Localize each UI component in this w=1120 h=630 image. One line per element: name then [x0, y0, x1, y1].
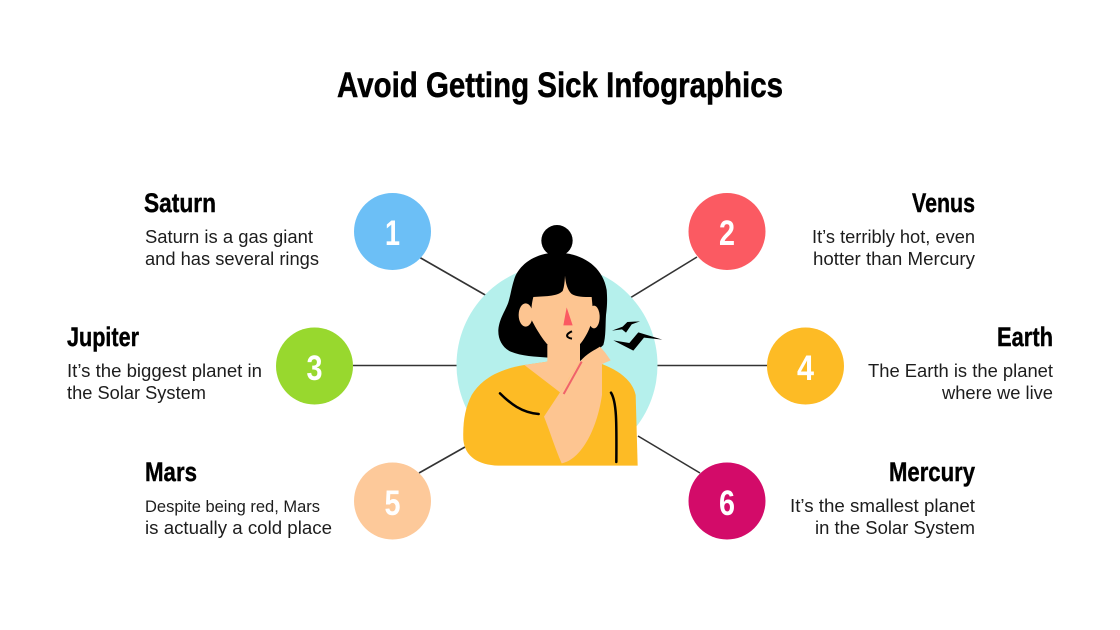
item 5: Mars: 5 — [384, 484, 400, 523]
item 2: Venus: 2 — [719, 214, 735, 253]
item 3: Jupiter: It’s the biggest planet in — [67, 361, 262, 381]
item 2: Venus — [688, 188, 975, 270]
item 1: Saturn: 1 — [385, 214, 400, 253]
shirt — [463, 362, 638, 466]
item 3: Jupiter: Jupiter — [67, 322, 139, 352]
item 3: Jupiter: 3 — [306, 349, 322, 388]
item 1: Saturn: Saturn is a gas giant — [145, 227, 313, 247]
shirt creases — [500, 393, 539, 414]
item 1: Saturn: Saturn — [144, 188, 216, 218]
neck and chest — [524, 343, 580, 392]
hair bun — [541, 225, 573, 256]
title: Avoid Getting Sick Infographics — [337, 66, 783, 105]
background circle — [456, 264, 658, 466]
item 2: Venus: hotter than Mercury — [813, 249, 975, 269]
ears — [519, 303, 533, 327]
item 6: Mercury: It’s the smallest planet — [790, 496, 975, 516]
mouth — [567, 331, 572, 339]
item 5: Mars: Despite being red, Mars — [145, 497, 320, 516]
red neck mark — [564, 362, 582, 394]
item 1: Saturn: and has several rings — [145, 249, 319, 269]
item 5: Mars: is actually a cold place — [145, 518, 332, 538]
nose — [563, 307, 573, 325]
item 4: Earth: where we live — [941, 383, 1053, 403]
item 4: Earth: The Earth is the planet — [868, 361, 1053, 381]
item 1: Saturn — [144, 188, 431, 270]
hair — [498, 253, 607, 361]
item 5: Mars — [145, 457, 431, 540]
item 3: Jupiter — [67, 322, 353, 404]
item 4: Earth: Earth — [997, 322, 1053, 352]
pain lightning marks — [612, 321, 640, 333]
item 6: Mercury: Mercury — [889, 457, 975, 487]
item 2: Venus: Venus — [912, 188, 975, 218]
item 2: Venus: It’s terribly hot, even — [812, 227, 975, 247]
connector lines — [353, 257, 768, 473]
item 5: Mars: Mars — [145, 457, 197, 487]
face — [531, 276, 593, 352]
item 4: Earth: 4 — [797, 349, 814, 388]
item 6: Mercury — [688, 457, 975, 540]
item 6: Mercury: in the Solar System — [815, 518, 975, 538]
central illustration: sick woman — [456, 225, 662, 466]
hand and arm — [544, 347, 611, 463]
item 4: Earth — [767, 322, 1053, 404]
item 6: Mercury: 6 — [719, 484, 735, 523]
item 3: Jupiter: the Solar System — [67, 383, 206, 403]
